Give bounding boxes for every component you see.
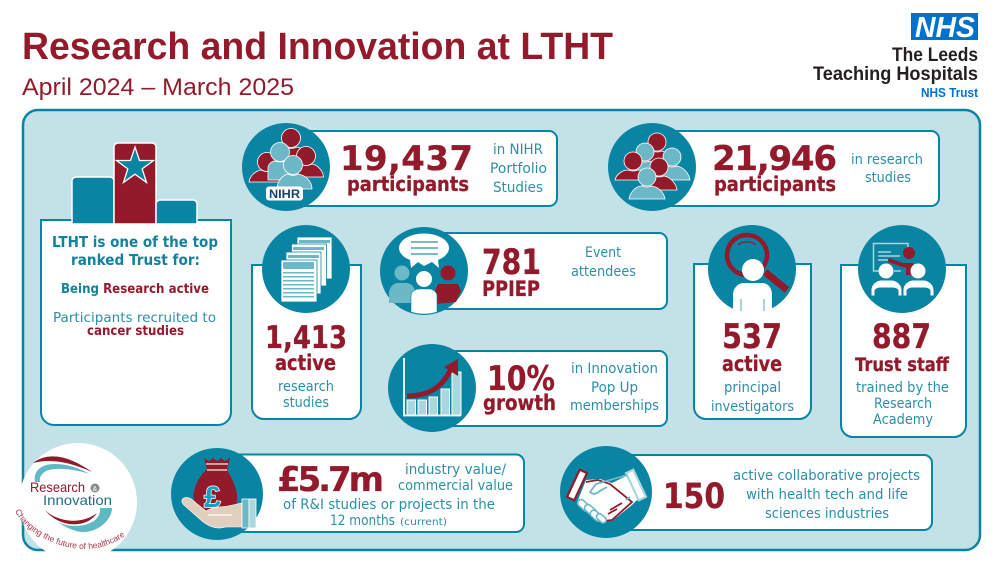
- title: Research and Innovation at LTHT: [22, 26, 613, 68]
- text: in NIHR Portfolio Studies: [490, 142, 547, 196]
- text: Event attendees: attendees: [571, 264, 636, 280]
- NHS logo: Teaching Hospitals: [813, 64, 978, 85]
- icon: hand holding money bag: [171, 448, 263, 540]
- icon: hand holding money bag: £: [204, 481, 221, 514]
- text: in research studies: in research: [851, 152, 923, 168]
- NHS logo: The Leeds: [892, 45, 978, 66]
- logo: Research & Innovation: Research: [30, 479, 85, 495]
- icon: training presenter: [858, 225, 946, 313]
- text: principal investigators: investigators: [711, 399, 794, 415]
- text: in research studies: [851, 152, 923, 186]
- text: trained by the Research Academy: [856, 380, 949, 428]
- figure: 10%: 10%: [487, 359, 555, 399]
- text: top ranked statement: cancer studies: [87, 324, 184, 339]
- text: top ranked statement: LTHT is one of the top: [52, 233, 218, 251]
- figure: 1,413: 1,413: [265, 320, 347, 356]
- figure: 781: 781: [482, 243, 541, 283]
- panel: 150 collaborative projects: [560, 446, 932, 538]
- icon: research participants: [608, 123, 696, 211]
- label: participants: participants: [347, 172, 469, 196]
- label: PPIEP: PPIEP: [482, 277, 540, 301]
- text: research studies: research: [278, 379, 334, 395]
- figure: £5.7m: £5.7m: [277, 460, 384, 500]
- text: trained by the Research Academy: Academy: [873, 412, 933, 428]
- label: active: active: [722, 352, 782, 376]
- text: collaborative projects description: with health tech and life: [746, 487, 908, 503]
- icon: handshake: [560, 446, 652, 538]
- text: value description: 12 months: [330, 513, 395, 529]
- text: value description: commercial value: [398, 478, 513, 494]
- label: Trust staff: Trust staff: [855, 355, 950, 376]
- figure: 150: 150: [663, 477, 725, 517]
- text: top ranked statement: Participants recruited to: [53, 310, 216, 326]
- text: in NIHR Portfolio Studies: Portfolio: [490, 161, 547, 177]
- icon: ranking podium with star: [72, 143, 197, 224]
- panel: £5.7m value: [171, 448, 524, 540]
- panel: 19,437 participants: [242, 123, 557, 211]
- text: value description: [283, 462, 513, 529]
- logo: Research & Innovation: &: [92, 486, 98, 493]
- text: collaborative projects description: sciences industries: [765, 506, 889, 522]
- NHS logo: [813, 12, 979, 100]
- text: research studies: [278, 379, 334, 411]
- text: in Innovation Pop Up memberships: in Innovation: [571, 361, 658, 377]
- text: Event attendees: [571, 245, 636, 280]
- figure: 19,437: 19,437: [340, 139, 473, 179]
- text: in Innovation Pop Up memberships: memberships: [570, 398, 659, 414]
- icon: NIHR participants: NIHR: [269, 187, 300, 201]
- text: trained by the Research Academy: Research: [874, 396, 932, 412]
- figure: 887: 887: [872, 317, 931, 357]
- NHS logo: NHS Trust: [921, 85, 979, 100]
- text: trained by the Research Academy: trained by the: [856, 380, 949, 396]
- text: in research studies: studies: [865, 170, 911, 186]
- icon: speech bubble and people: [380, 227, 468, 315]
- text: value description: industry value/: [405, 462, 506, 478]
- icon: magnifier over person: [708, 225, 796, 315]
- text: top ranked statement: Being Research active: [61, 282, 209, 297]
- panel: 21,946 participants: [608, 123, 939, 211]
- panel: 887 Trust staff: [841, 225, 966, 437]
- icon: NIHR participants: [242, 123, 330, 211]
- panel: 781 PPIEP: [380, 227, 667, 315]
- figure: 21,946: 21,946: [712, 139, 837, 179]
- subtitle: April 2024 – March 2025: [22, 74, 294, 101]
- figure: 537: 537: [722, 317, 782, 357]
- text: top ranked statement: [52, 233, 218, 339]
- logo: Research & Innovation: [16, 443, 137, 552]
- label: growth: growth: [483, 391, 556, 415]
- text: research studies: studies: [283, 395, 329, 411]
- logo: Research & Innovation: Changing the future of healthcare: [16, 510, 124, 550]
- text: in Innovation Pop Up memberships: Pop Up: [591, 380, 638, 396]
- text: value description: (current): [400, 517, 447, 528]
- text: value description: of R&I studies or projects in the: [283, 497, 495, 513]
- text: principal investigators: [711, 380, 794, 415]
- text: Event attendees: Event: [585, 245, 621, 261]
- main panel background: [23, 110, 980, 550]
- text: in Innovation Pop Up memberships: [570, 361, 659, 414]
- label: active: active: [275, 351, 336, 375]
- panel: 10% growth: [388, 344, 667, 432]
- panel: 537 active principal investigators: [694, 225, 811, 419]
- text: top ranked statement: ranked Trust for:: [71, 251, 200, 269]
- icon: growth chart: [388, 344, 476, 432]
- text: collaborative projects description: active collaborative projects: [733, 468, 920, 484]
- text: principal investigators: principal: [724, 380, 781, 396]
- panel: top ranked Trust: [41, 143, 231, 425]
- panel: 1,413 active research studies: [252, 225, 361, 419]
- text: in NIHR Portfolio Studies: in NIHR: [493, 142, 543, 158]
- NHS logo: NHS: [915, 12, 976, 44]
- text: collaborative projects description: [733, 468, 920, 522]
- icon: document stack: [262, 225, 350, 313]
- text: in NIHR Portfolio Studies: Studies: [493, 180, 543, 196]
- label: participants: participants: [714, 172, 836, 196]
- logo: Research & Innovation: Innovation: [43, 492, 112, 508]
